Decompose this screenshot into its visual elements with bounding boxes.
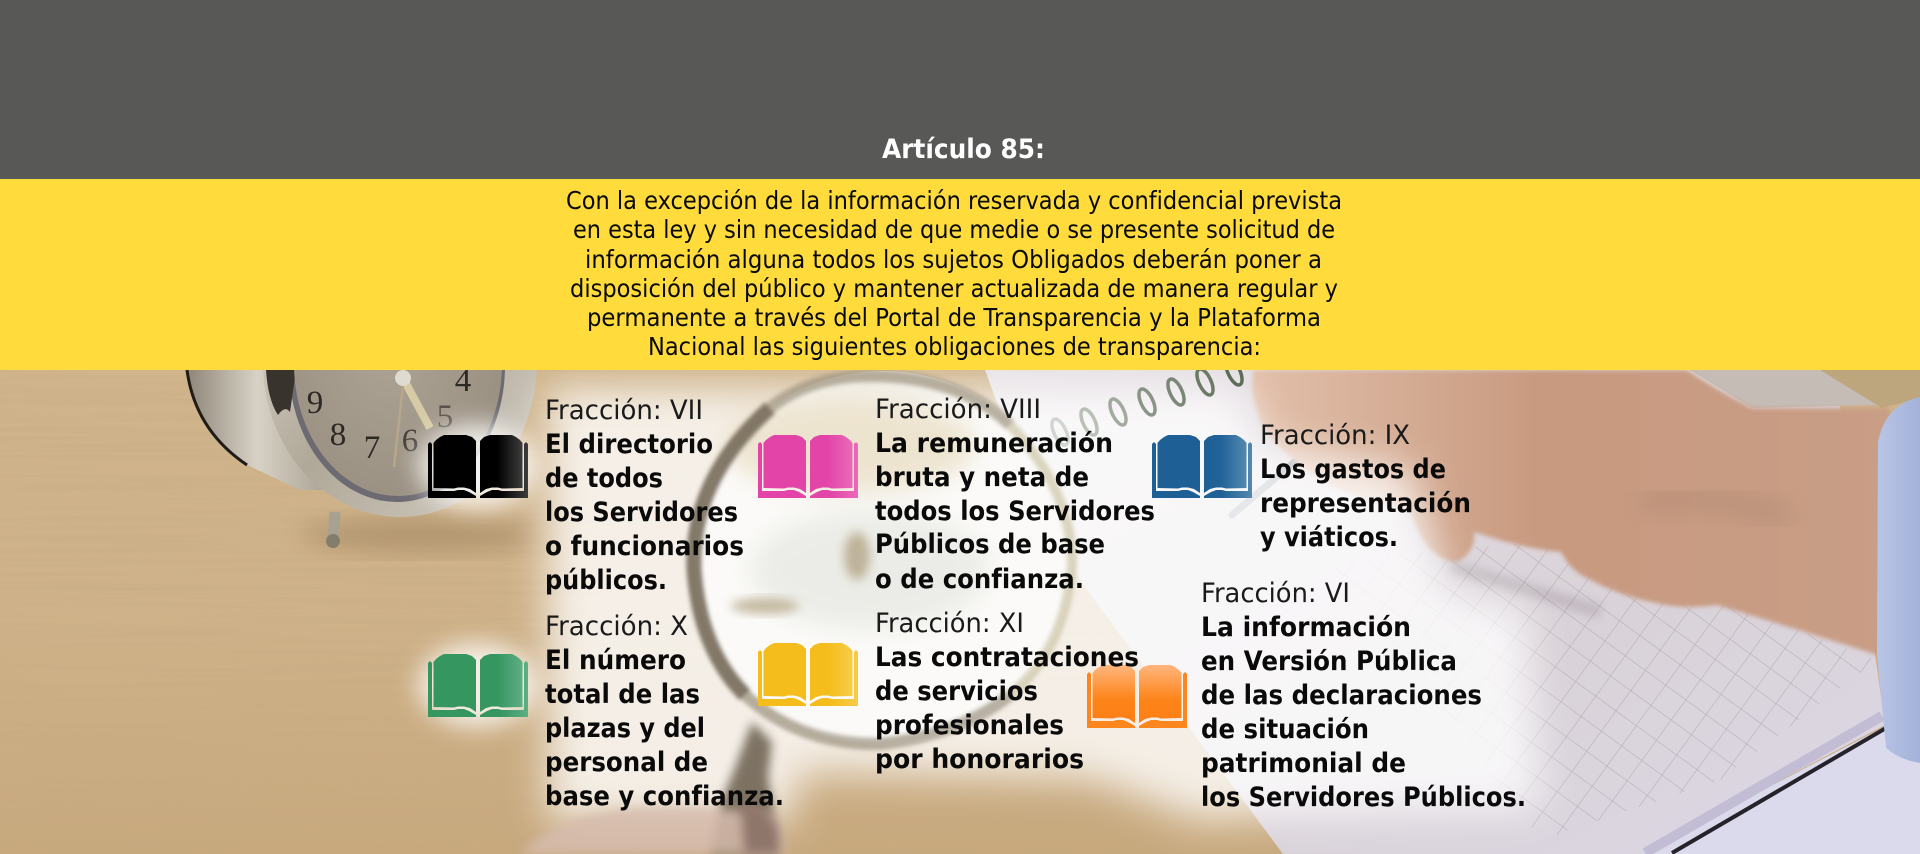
text block: fracción IX: Fracción: IX (1260, 420, 1410, 451)
text block: fracción VIII: bruta y neta de (875, 462, 1089, 493)
text block: fracción XI: profesionales (875, 710, 1064, 741)
text block: fracción XI: Fracción: XI (875, 608, 1024, 639)
intro text: permanente a través del Portal de Transparencia y la Plataforma (587, 303, 1321, 332)
icon: yellow book (758, 643, 858, 706)
text block: fracción VI: patrimonial de (1201, 748, 1406, 779)
icon: green book (428, 654, 528, 717)
clock numerals (308, 370, 471, 458)
text block: fracción VIII: todos los Servidores (875, 496, 1155, 527)
intro text: información alguna todos los sujetos Obligados deberán poner a (585, 245, 1322, 274)
magnifier handle (710, 722, 776, 854)
text block: fracción VII (545, 395, 744, 596)
text block: fracción VII: Fracción: VII (545, 395, 703, 426)
intro text: Con la excepción de la información reservada y confidencial prevista (566, 186, 1342, 215)
text block: fracción VIII: o de confianza. (875, 564, 1084, 595)
icon: pink book (758, 435, 858, 498)
intro text: disposición del público y mantener actualizada de manera regular y (570, 274, 1338, 303)
clock numerals: 4 (455, 363, 471, 399)
text block: fracción X: personal de (545, 747, 708, 778)
text block: fracción XI: por honorarios (875, 744, 1084, 775)
text block: fracción VI: los Servidores Públicos. (1201, 782, 1526, 813)
header band (0, 0, 1920, 179)
text block: fracción VII: de todos (545, 463, 663, 494)
text block: fracción VII: los Servidores (545, 497, 738, 528)
clock numerals: 5 (437, 399, 453, 435)
intro text (566, 186, 1342, 361)
text block: fracción VII: públicos. (545, 565, 667, 596)
text block: fracción VIII (875, 394, 1155, 595)
title: Artículo 85: (882, 134, 1045, 165)
magnifier ring (694, 376, 1072, 744)
text block: fracción VIII: Fracción: VIII (875, 394, 1041, 425)
text block: fracción XI (875, 608, 1139, 775)
text block: fracción X: base y confianza. (545, 781, 784, 812)
text block: fracción X (545, 611, 784, 812)
icon: blue book (1152, 435, 1252, 498)
intro text: Nacional las siguientes obligaciones de transparencia: (648, 332, 1261, 361)
text block: fracción VII: El directorio (545, 429, 713, 460)
icon: orange book (1087, 665, 1187, 728)
text block: fracción VI: de las declaraciones (1201, 680, 1482, 711)
white glow behind text (548, 388, 1540, 822)
text block: fracción IX: y viáticos. (1260, 522, 1398, 553)
text block: fracción XI: Las contrataciones (875, 642, 1139, 673)
clock numerals: 8 (330, 417, 346, 453)
text block: fracción IX: representación (1260, 488, 1471, 519)
text block: fracción VII: o funcionarios (545, 531, 744, 562)
text block: fracción VI: en Versión Pública (1201, 646, 1457, 677)
text block: fracción IX: Los gastos de (1260, 454, 1446, 485)
text block: fracción XI: de servicios (875, 676, 1038, 707)
notebook spiral (1050, 370, 1244, 447)
text block: fracción IX (1260, 420, 1471, 553)
text block: fracción VI: La información (1201, 612, 1411, 643)
text block: fracción VI (1201, 578, 1526, 813)
clock numerals: 6 (402, 423, 418, 459)
hand holding magnifier (520, 808, 786, 854)
icon: black book (428, 435, 528, 498)
text block: fracción X: plazas y del (545, 713, 705, 744)
yellow text band (0, 179, 1920, 370)
magnifier lens tint (725, 397, 990, 630)
clock numerals: 9 (307, 385, 323, 421)
background photo: desk, clock, magnifier, notebook, hand (0, 370, 1920, 854)
text block: fracción VI: de situación (1201, 714, 1369, 745)
clock numerals: 7 (364, 430, 380, 466)
text block: fracción VIII: Públicos de base (875, 529, 1105, 560)
text block: fracción VI: Fracción: VI (1201, 578, 1350, 609)
text block: fracción X: Fracción: X (545, 611, 688, 642)
text block: fracción X: El número (545, 645, 686, 676)
intro text: en esta ley y sin necesidad de que medie o se presente solicitud de (573, 215, 1335, 244)
text block: fracción VIII: La remuneración (875, 428, 1113, 459)
text block: fracción X: total de las (545, 679, 700, 710)
